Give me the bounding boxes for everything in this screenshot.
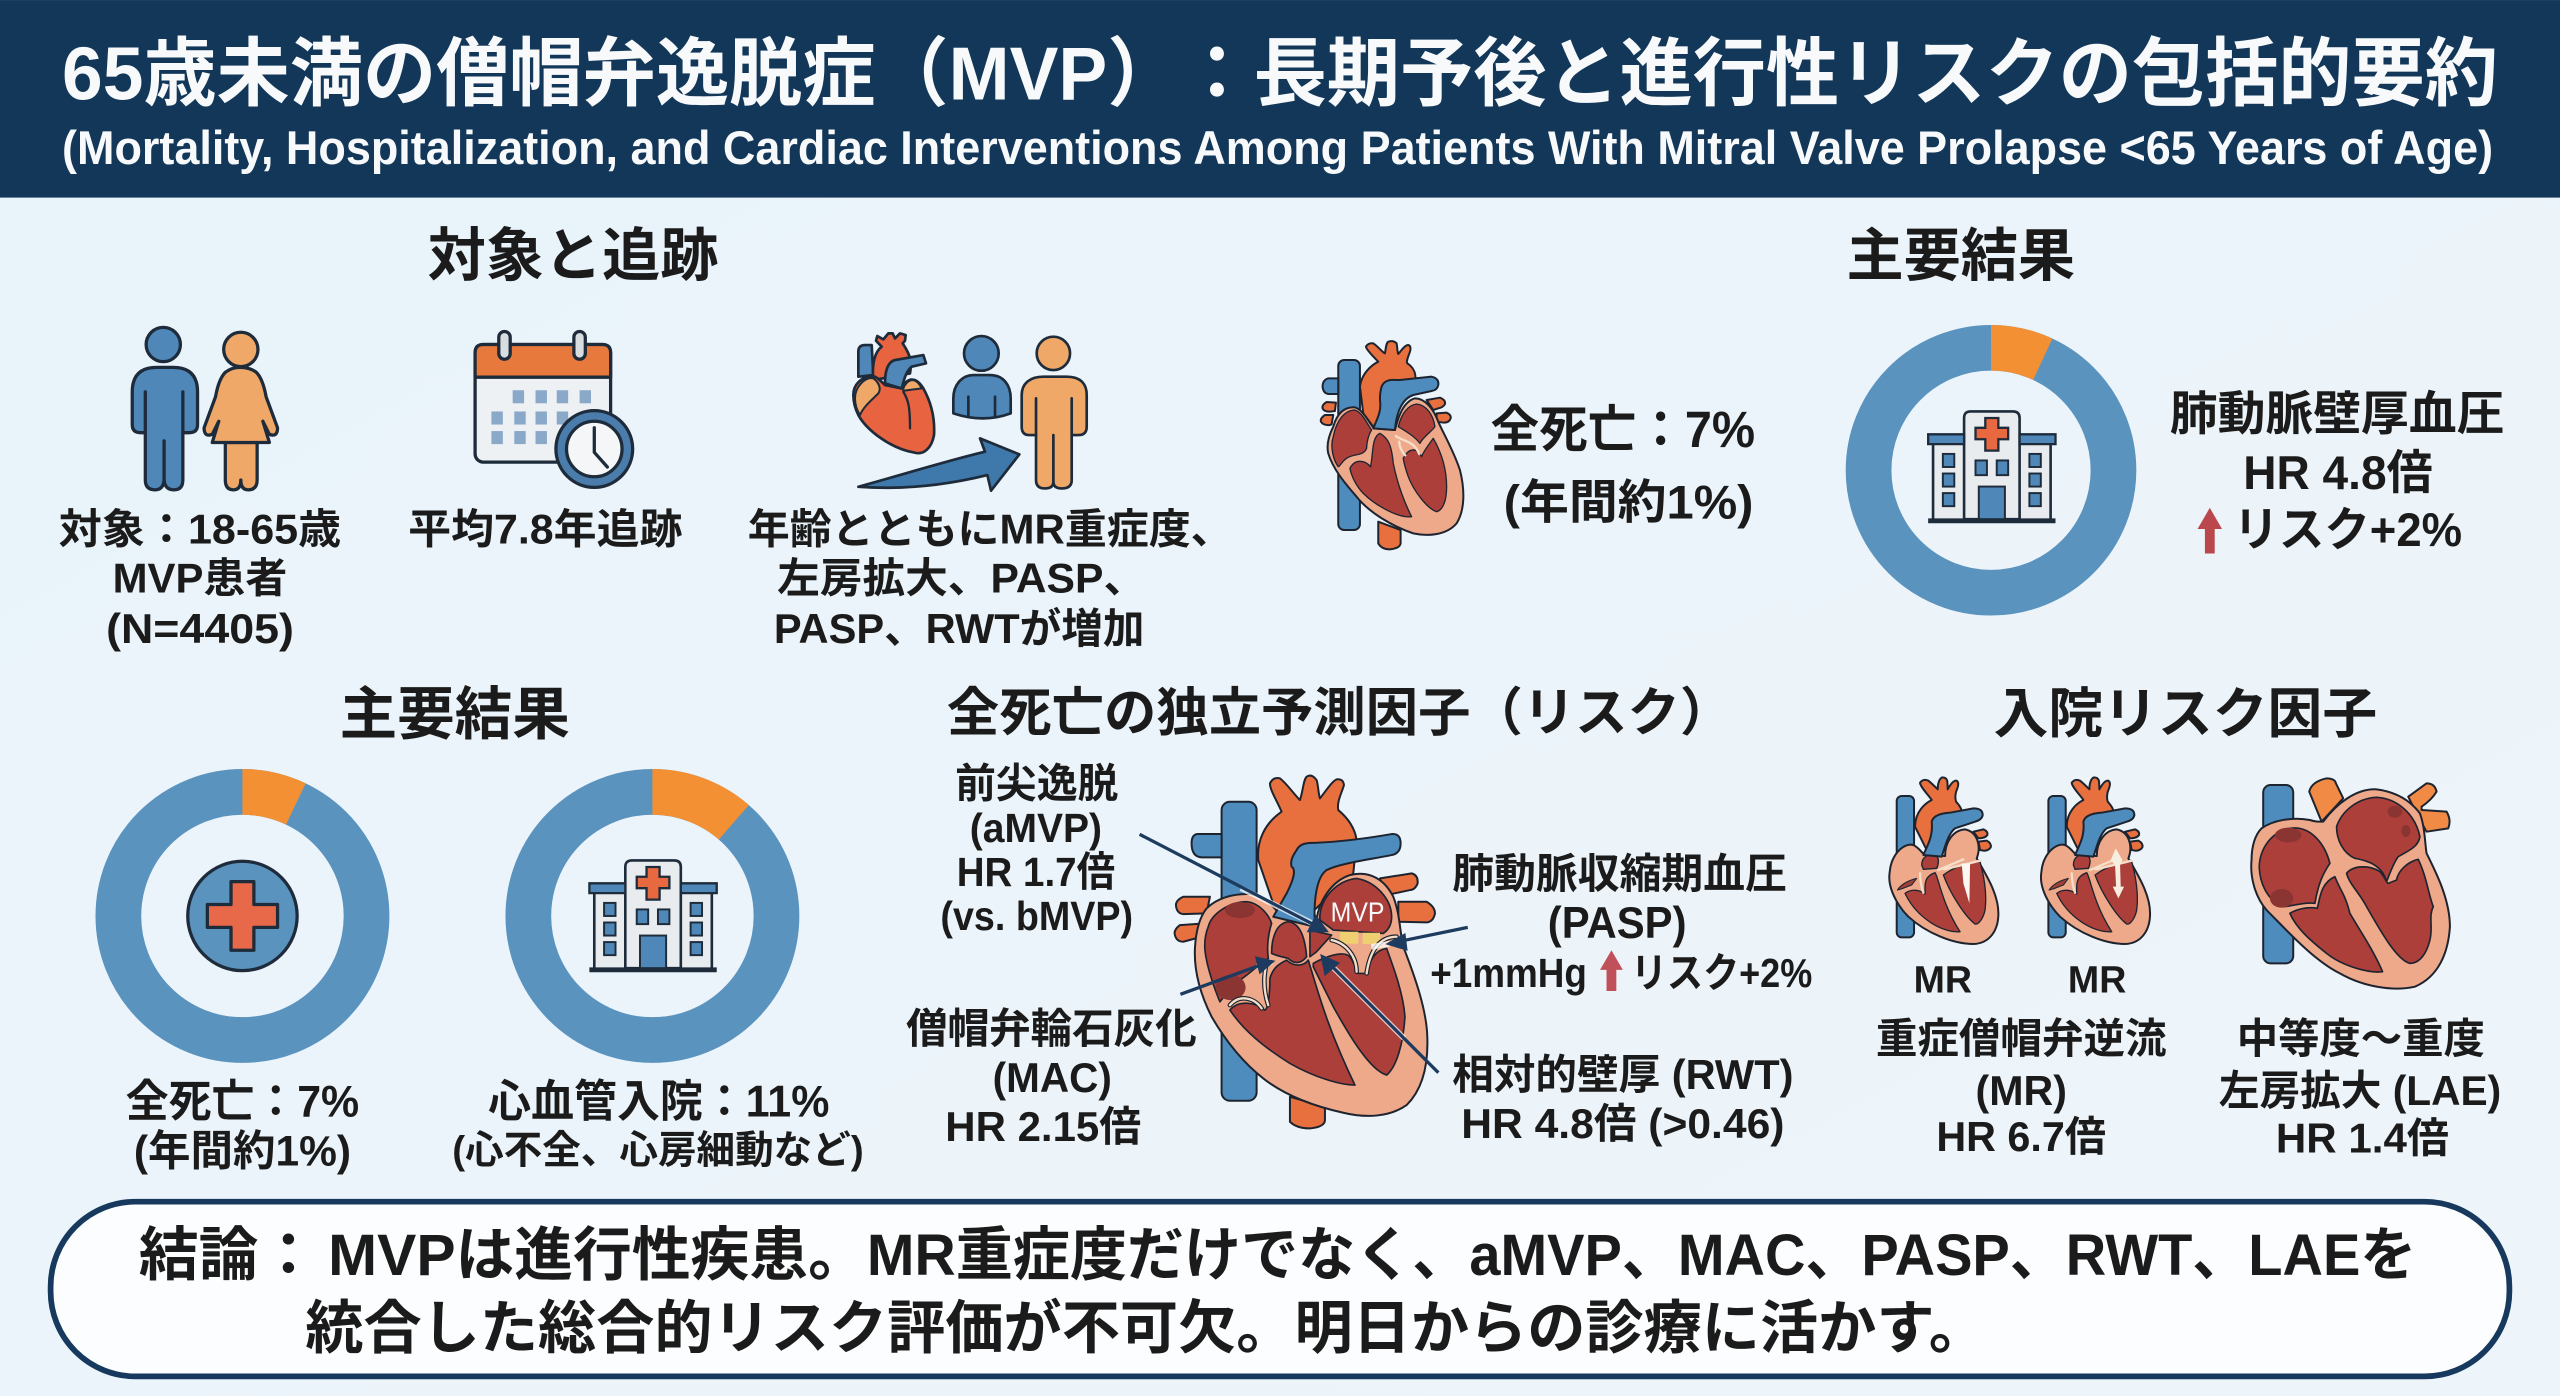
label: MAC: 僧帽弁輪石灰化	[906, 1005, 1197, 1052]
icon: MR heart 2	[2041, 777, 2150, 944]
label: 左房拡大: 中等度〜重度	[2237, 1015, 2485, 1062]
text: 年齢とともに: 左房拡大、PASP、	[777, 555, 1146, 602]
icon: man and woman	[132, 327, 278, 490]
text: 年齢とともに	[748, 506, 1233, 652]
conclusion callout: MR重症度だけでなく、	[867, 1223, 1469, 1288]
text: 対象	[59, 506, 341, 652]
label: PASP: (PASP)	[1548, 899, 1687, 948]
heading: 対象と追跡: 対象と追跡	[428, 224, 718, 288]
label: MAC	[906, 1005, 1197, 1150]
text: 対象: 対象：18-65歳	[59, 506, 341, 553]
icon: red up arrow	[2198, 508, 2222, 554]
label: MAC: HR 2.15倍	[945, 1103, 1141, 1150]
label: 重症僧帽弁逆流	[1876, 1015, 2167, 1160]
conclusion callout: 統合した総合的リスク評価が不可欠。明日からの診療に活かす。	[305, 1297, 1987, 1361]
donut chart: mortality	[118, 792, 367, 1040]
label: aMVP: 前尖逸脱	[955, 761, 1119, 807]
heading: 入院リスク因子: 入院リスク因子	[1993, 683, 2377, 745]
label: aMVP: (vs. bMVP)	[940, 893, 1133, 939]
heading: 全死亡の独立予測因子: 全死亡の独立予測因子（リスク）	[947, 685, 1732, 743]
MR labels: MR	[1914, 959, 1972, 1001]
text: 対象: MVP患者	[113, 555, 287, 602]
label: 左房拡大: HR 1.4倍	[2276, 1114, 2449, 1161]
label: PASP: +1mmHg	[1430, 950, 1587, 996]
label: 重症僧帽弁逆流: HR 6.7倍	[1936, 1113, 2106, 1160]
text: 年齢とともに: 年齢とともにMR重症度、	[748, 506, 1233, 553]
text: 全死亡 label: 全死亡：7%	[126, 1078, 359, 1127]
text: 全死亡 label: (年間約1%)	[134, 1128, 351, 1175]
title: 65歳未満の僧帽弁逸脱症（MVP）：長期予後と進行性リスクの包括的要約	[62, 32, 2498, 116]
header banner	[0, 0, 2560, 198]
text: 肺動脈壁厚血圧	[2170, 388, 2504, 557]
icon: MR heart 1	[1889, 777, 1998, 944]
label: RWT: 相対的壁厚 (RWT)	[1452, 1051, 1793, 1098]
text: 全死亡 7%	[1491, 401, 1755, 529]
label: 重症僧帽弁逆流: (MR)	[1976, 1067, 2067, 1114]
icon: red up arrow	[1600, 950, 1623, 991]
text: 対象: (N=4405)	[106, 605, 294, 652]
leader arrows	[1140, 834, 1468, 1073]
conclusion callout: MVPは進行性疾患。	[328, 1223, 867, 1288]
label: aMVP: HR 1.7倍	[957, 849, 1115, 895]
label: RWT: HR 4.8倍 (>0.46)	[1461, 1100, 1784, 1147]
conclusion callout: aMVP、MAC、PASP、RWT、LAEを	[1469, 1223, 2416, 1288]
heading: 主要結果 (lower): 主要結果	[340, 683, 570, 747]
text: 肺動脈壁厚血圧: HR 4.8倍	[2243, 447, 2433, 500]
donut chart: hospitalization	[528, 792, 776, 1040]
icon: calendar with clock	[475, 331, 633, 487]
label: MVP on heart: MVP	[1331, 896, 1384, 927]
icon: enlarged left atrium heart	[2251, 778, 2450, 989]
text: 心血管入院 label	[452, 1078, 864, 1173]
subtitle: (Mortality, Hospitalization, and Cardiac Interventions Among Patients With Mitral Valve Prolapse <65 Years of Age)	[62, 122, 2493, 175]
donut chart with hospital icon (top)	[1869, 348, 2113, 593]
label: PASP: 肺動脈収縮期血圧	[1452, 850, 1787, 897]
label: 重症僧帽弁逆流: 重症僧帽弁逆流	[1876, 1015, 2167, 1062]
text: 心血管入院 label: 心血管入院：11%	[488, 1078, 829, 1127]
icon: heart anatomy (top)	[1321, 341, 1463, 549]
label: PASP	[1430, 850, 1812, 996]
label: aMVP	[940, 761, 1133, 939]
MR labels: MR	[2068, 959, 2126, 1001]
label: 左房拡大: 左房拡大 (LAE)	[2219, 1067, 2501, 1114]
text: 全死亡 label	[126, 1078, 359, 1175]
text: 肺動脈壁厚血圧: 肺動脈壁厚血圧	[2170, 388, 2504, 441]
text: 全死亡 7%: (年間約1%)	[1504, 476, 1753, 529]
text: 心血管入院 label: (心不全、心房細動など)	[452, 1130, 864, 1173]
heading: 主要結果 (top): 主要結果	[1847, 224, 2075, 288]
label: aMVP: (aMVP)	[970, 805, 1102, 851]
MR labels	[1914, 959, 2126, 1001]
icon: medical cross	[188, 861, 297, 971]
text: 平均追跡: 平均7.8年追跡	[408, 506, 682, 553]
text: 年齢とともに: PASP、RWTが増加	[774, 605, 1144, 652]
label: RWT	[1452, 1051, 1793, 1147]
text: 肺動脈壁厚血圧: リスク+2%	[2233, 504, 2462, 557]
text: 全死亡 7%: 全死亡：7%	[1491, 401, 1755, 458]
icon: heart, people and rising arrow	[853, 333, 1087, 491]
conclusion callout: 結論：	[139, 1223, 318, 1288]
conclusion callout	[51, 1202, 2509, 1376]
label: 左房拡大	[2219, 1015, 2501, 1161]
heart anatomy diagram (center)	[1175, 776, 1435, 1128]
label: MAC: (MAC)	[993, 1054, 1112, 1101]
label: PASP: リスク+2%	[1631, 950, 1812, 996]
